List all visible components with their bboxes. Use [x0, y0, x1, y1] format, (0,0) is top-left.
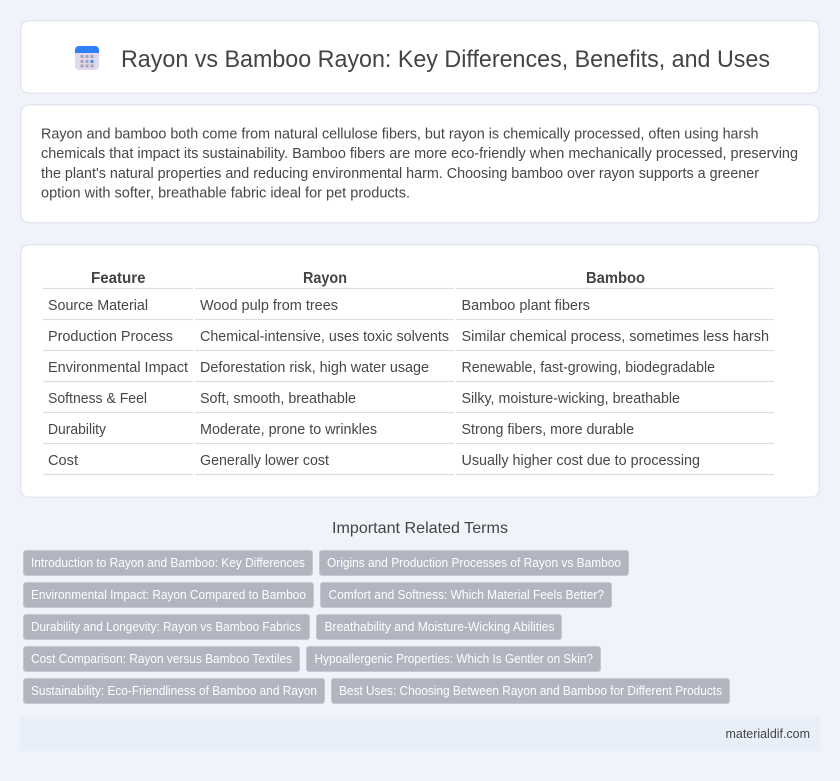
- related terms chips: [24, 550, 730, 704]
- chip: [316, 614, 562, 640]
- header panel: [21, 21, 819, 93]
- row: production process: Similar chemical process, sometimes less harsh: [462, 329, 769, 345]
- row: cost: Usually higher cost due to processing: [462, 453, 700, 469]
- row: production process: Production Process: [48, 329, 173, 345]
- row: environmental impact: Renewable, fast-growing, biodegradable: [462, 360, 715, 376]
- chip: [320, 550, 628, 576]
- chip: Durability and Longevity: Rayon vs Bamboo Fabrics: [31, 620, 301, 634]
- panel: comparison table: [21, 245, 819, 497]
- icon: calendar: [75, 46, 99, 70]
- footer bar: [20, 717, 820, 751]
- chip: Introduction to Rayon and Bamboo: Key Differences: [31, 556, 305, 570]
- row: environmental impact: Deforestation risk, high water usage: [200, 360, 429, 376]
- table header row: Feature: [91, 270, 146, 287]
- row: cost: Generally lower cost: [200, 453, 329, 469]
- chip: Cost Comparison: Rayon versus Bamboo Textiles: [31, 652, 292, 666]
- intro paragraph: the plant's natural properties and reducing environmental harm. Choosing bamboo over rayon supports a greener: [41, 166, 759, 182]
- chip: Environmental Impact: Rayon Compared to Bamboo: [31, 588, 306, 602]
- chip: [332, 678, 730, 704]
- chip: [24, 678, 324, 704]
- chip: [24, 646, 300, 672]
- chip: [320, 582, 612, 608]
- chip: [24, 614, 310, 640]
- table header row: Rayon: [303, 270, 347, 287]
- row: source material: [48, 298, 590, 314]
- row: durability: [48, 422, 634, 438]
- chip: Comfort and Softness: Which Material Feels Better?: [328, 588, 604, 602]
- row: softness and feel: Softness & Feel: [48, 391, 147, 407]
- row: source material: Wood pulp from trees: [200, 298, 338, 314]
- row: softness and feel: Silky, moisture-wicking, breathable: [462, 391, 680, 407]
- intro paragraph: chemicals that impact its sustainability. Bamboo fibers are more eco-friendly when mechanically processed, preserving: [41, 146, 798, 162]
- row: durability: Durability: [48, 422, 107, 438]
- heading: important related terms: Important Related Terms: [332, 520, 508, 537]
- chip: [306, 646, 600, 672]
- panel: introduction: [21, 105, 819, 223]
- chip: Sustainability: Eco-Friendliness of Bamboo and Rayon: [31, 684, 317, 698]
- table header row: [91, 270, 645, 287]
- table header row: Bamboo: [586, 270, 645, 287]
- footer source text: materialdif.com: [726, 727, 810, 741]
- chip: [24, 550, 312, 576]
- chip: Best Uses: Choosing Between Rayon and Bamboo for Different Products: [339, 684, 722, 698]
- row: environmental impact: [48, 360, 715, 376]
- row: durability: Strong fibers, more durable: [462, 422, 634, 438]
- intro paragraph: Rayon and bamboo both come from natural cellulose fibers, but rayon is chemically processed, often using harsh: [41, 126, 758, 142]
- row: source material: Bamboo plant fibers: [462, 298, 590, 314]
- row: production process: Chemical-intensive, uses toxic solvents: [200, 329, 449, 345]
- row: source material: Source Material: [48, 298, 148, 314]
- row: softness and feel: [48, 391, 680, 407]
- row: cost: Cost: [48, 453, 78, 469]
- row: cost: [48, 453, 700, 469]
- chip: [24, 582, 314, 608]
- chip: Breathability and Moisture-Wicking Abilities: [324, 620, 554, 634]
- chip: Origins and Production Processes of Rayon vs Bamboo: [327, 556, 621, 570]
- title: Rayon vs Bamboo Rayon: Key Differences, Benefits, and Uses: [121, 46, 770, 73]
- intro paragraph: option with softer, breathable fabric ideal for pet products.: [41, 186, 410, 202]
- row: environmental impact: Environmental Impact: [48, 360, 188, 376]
- row: softness and feel: Soft, smooth, breathable: [200, 391, 356, 407]
- intro paragraph: [41, 126, 798, 202]
- row: production process: [48, 329, 769, 345]
- row: durability: Moderate, prone to wrinkles: [200, 422, 377, 438]
- chip: Hypoallergenic Properties: Which Is Gentler on Skin?: [314, 652, 593, 666]
